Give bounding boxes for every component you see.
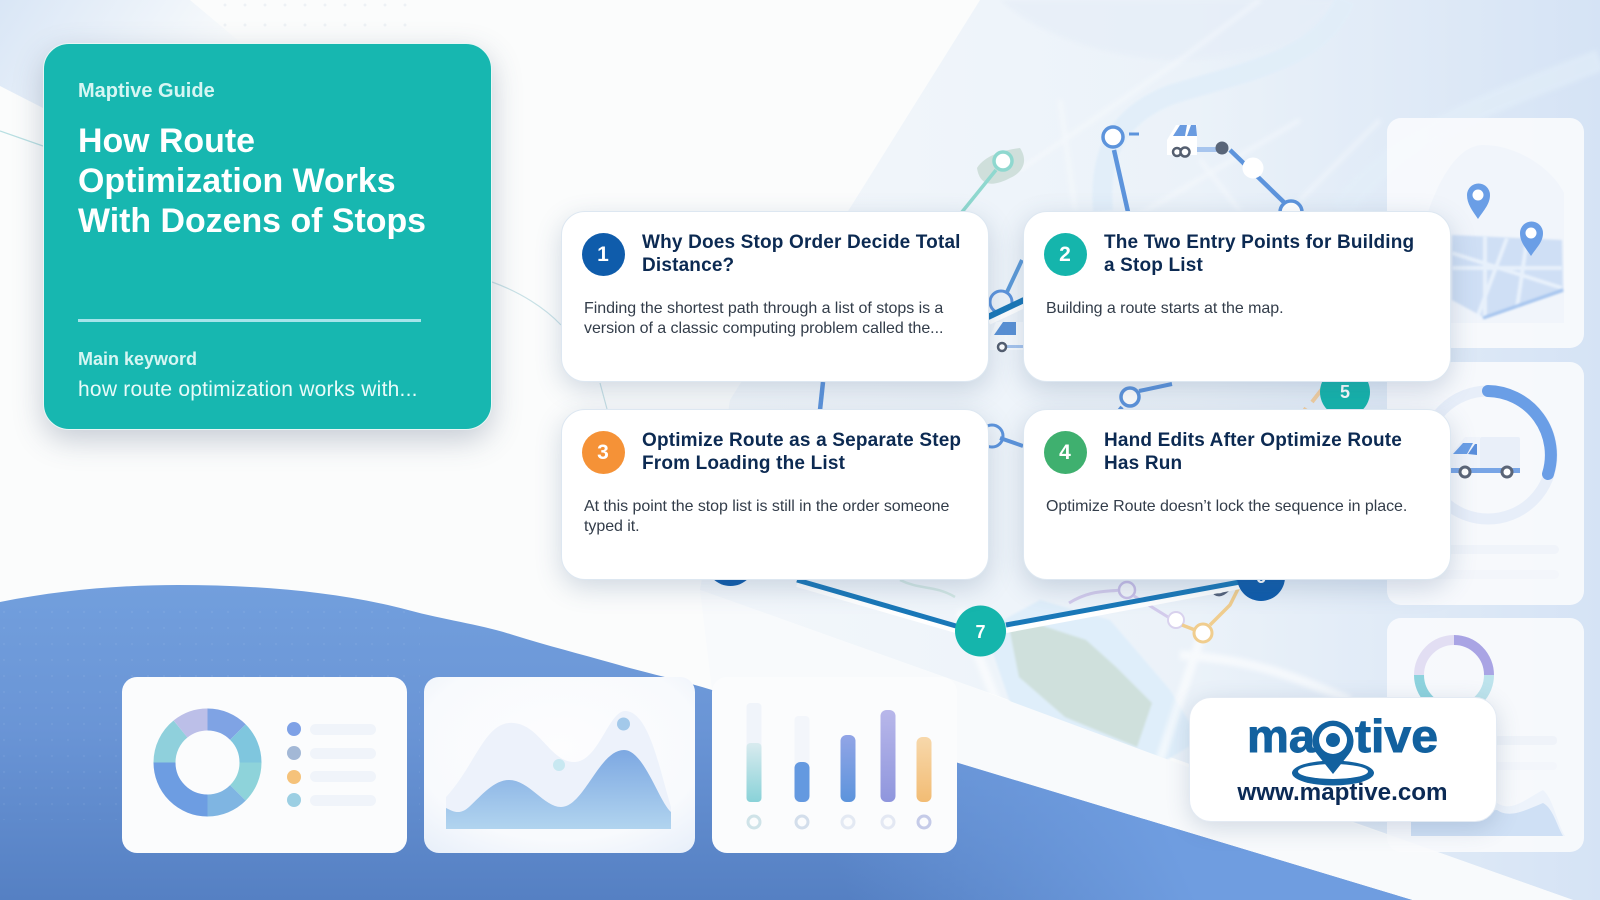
heading 3: Optimize Route as a Separate Step [642, 430, 961, 451]
progress arc [1488, 391, 1551, 474]
icon: truck [1451, 437, 1520, 477]
front area [446, 750, 671, 829]
number 1 [582, 232, 624, 276]
ring chart [1419, 640, 1489, 710]
heading 2: The Two Entry Points for Building [1104, 232, 1414, 253]
eyebrow: Maptive Guide [78, 80, 215, 102]
heading 4: Hand Edits After Optimize Route [1104, 430, 1402, 451]
number 3: 3 [597, 440, 609, 464]
route pieces between rows [820, 382, 1326, 447]
stop marker 8 [706, 536, 756, 586]
map area [700, 0, 1600, 900]
lower right white band [700, 590, 1573, 900]
panel: map pins card [1387, 118, 1584, 348]
heading 4 [1104, 430, 1402, 474]
stop marker 7: 7 [975, 622, 986, 642]
number 4 [1044, 430, 1086, 474]
route lower: purple and orange branches [900, 580, 1240, 642]
heading 1: Why Does Stop Order Decide Total [642, 232, 961, 253]
title: How Route [78, 122, 255, 160]
text 2: Building a route starts at the map. [1046, 300, 1284, 316]
keyword label: Main keyword [78, 349, 197, 369]
title: Optimization Works [78, 162, 396, 200]
maptive logo: tive [1354, 710, 1438, 762]
number 1: 1 [597, 242, 609, 266]
icon: pin small [1520, 222, 1543, 256]
heading 1: Distance? [642, 255, 734, 276]
heading 2 [1104, 232, 1414, 276]
keyword value: how route optimization works with... [78, 378, 418, 401]
text 1: Finding the shortest path through a list of stops is a version of a classic computing problem called the... [584, 300, 943, 337]
donut chart [164, 720, 250, 806]
card 1 [561, 211, 989, 382]
heading 1 [642, 232, 961, 276]
back area [446, 711, 671, 829]
text 4: Optimize Route doesn’t lock the sequence in place. [1046, 498, 1407, 514]
number 4: 4 [1059, 440, 1071, 464]
axis markers [748, 816, 930, 828]
heading 4: Has Run [1104, 453, 1182, 474]
top-left pale blue shape [0, 0, 240, 108]
heading 3: From Loading the List [642, 453, 845, 474]
small truck, top [1167, 125, 1228, 156]
title [78, 122, 426, 240]
number 3 [582, 430, 624, 474]
dark route with white casing [797, 580, 1240, 630]
website url: www.maptive.com [1237, 779, 1448, 806]
markers [617, 718, 630, 730]
logo card [1189, 697, 1497, 822]
connector lines [492, 282, 607, 409]
park [1009, 625, 1152, 747]
area chart [1411, 790, 1565, 836]
maptive logo: ma [1246, 710, 1315, 762]
heading 2: a Stop List [1104, 255, 1203, 276]
icon: pin large [1467, 184, 1490, 219]
card 2 [1023, 211, 1451, 382]
panel: bar chart card [712, 690, 957, 853]
panel: donut chart card [122, 677, 407, 853]
stop marker 7 [955, 606, 1006, 656]
card 4 [1023, 409, 1451, 580]
stop marker 6: 6 [1256, 567, 1266, 587]
number 2: 2 [1059, 242, 1071, 266]
bars [746, 703, 932, 802]
panel: ring and area card [1387, 618, 1584, 852]
text 3: At this point the stop list is still in the order someone typed it. [584, 498, 949, 535]
blue wave [0, 585, 1412, 900]
panel: area chart card [424, 677, 695, 853]
title: With Dozens of Stops [78, 202, 426, 240]
heading 3 [642, 430, 961, 474]
route between upper cards [988, 260, 1025, 351]
legend [287, 722, 376, 807]
panel: truck progress card [1387, 362, 1584, 605]
panel: guide title card [43, 43, 492, 430]
maptive logo [1246, 710, 1438, 786]
stop marker 5: 5 [1340, 382, 1350, 402]
divider [78, 319, 421, 322]
route: blue branch [1103, 127, 1302, 223]
number 2 [1044, 232, 1086, 276]
stop marker 6 [1237, 553, 1285, 601]
stop marker 5 [1320, 367, 1370, 417]
route: teal branch [962, 148, 1024, 212]
card 3 [561, 409, 989, 580]
